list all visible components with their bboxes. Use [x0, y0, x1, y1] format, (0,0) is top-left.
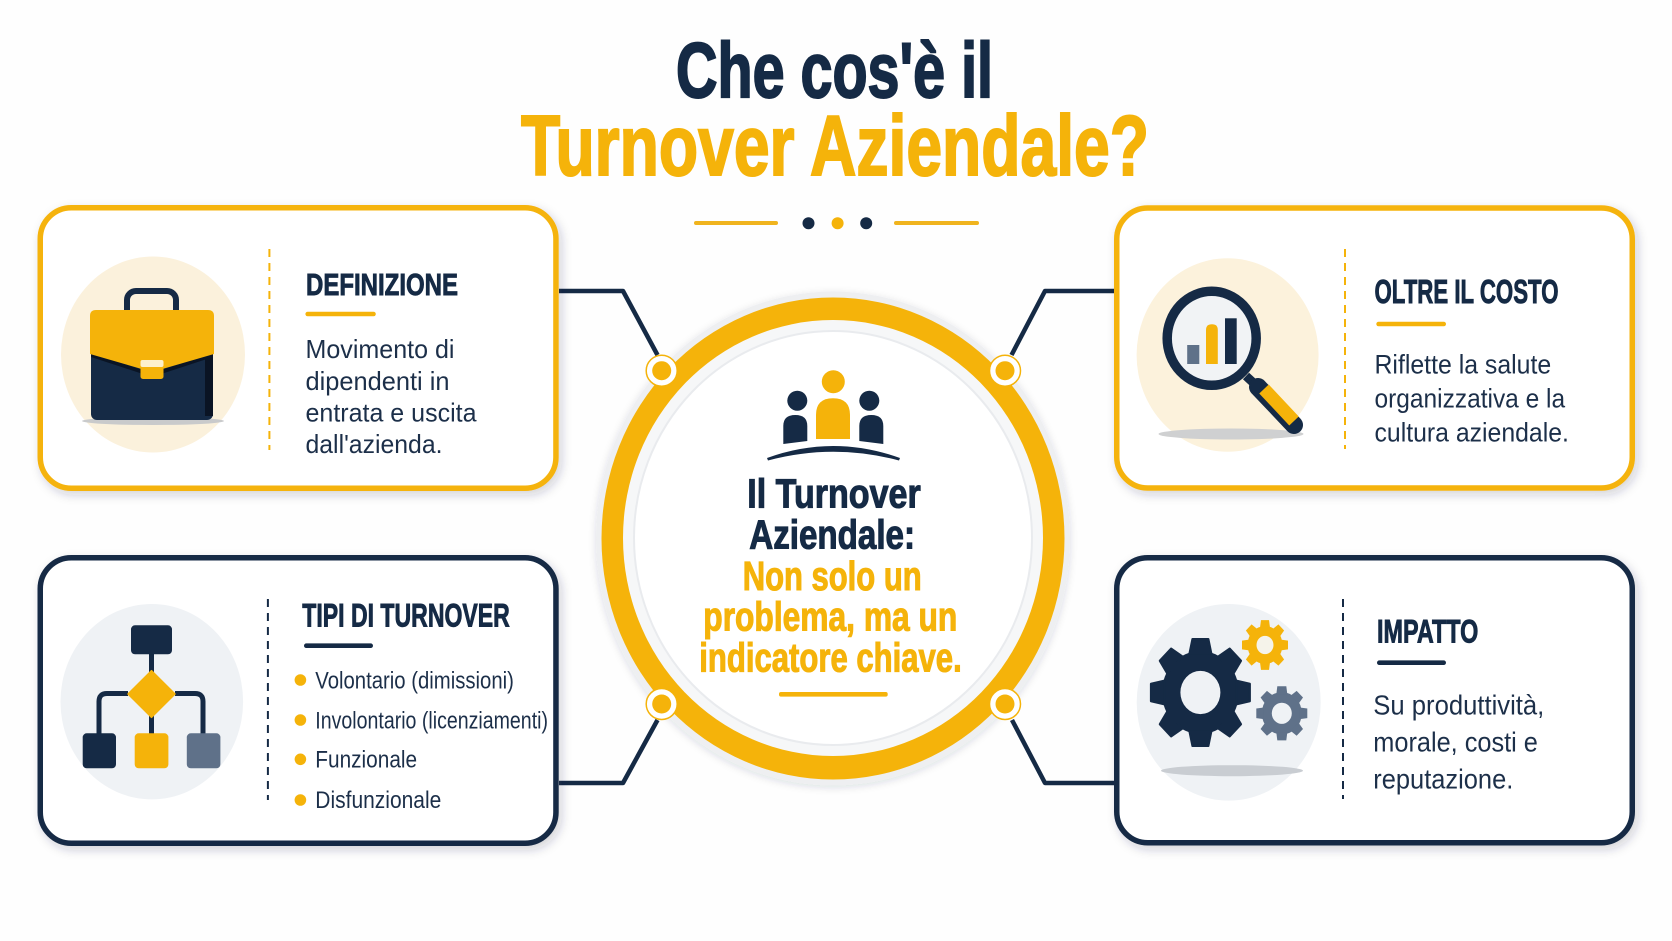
icon: org chart	[60, 604, 243, 799]
body text: organizzativa e la	[1374, 383, 1566, 413]
panel: definizione	[40, 208, 556, 488]
divider	[267, 599, 269, 800]
divider	[268, 249, 270, 450]
heading: TIPI DI TURNOVER	[302, 598, 510, 634]
icon: magnifier	[1137, 258, 1319, 452]
central circle	[596, 292, 1070, 786]
center text dark: Aziendale:	[749, 511, 915, 557]
heading: OLTRE IL COSTO	[1374, 273, 1558, 310]
body text: dipendenti in	[306, 366, 450, 396]
title	[521, 26, 1149, 194]
panel: impatto	[1117, 558, 1632, 843]
body text: morale, costi e	[1373, 726, 1538, 758]
center text yellow: Non solo un	[743, 553, 922, 599]
heading underline	[305, 312, 376, 316]
connectors	[559, 291, 1114, 783]
center text dark: Il Turnover	[747, 470, 921, 516]
heading: DEFINIZIONE	[306, 267, 458, 302]
body text	[1373, 689, 1544, 794]
body text: Movimento di	[306, 334, 454, 364]
body text	[306, 334, 477, 459]
small grey gear	[1256, 686, 1307, 740]
center text yellow: problema, ma un	[703, 594, 957, 640]
large gear	[1151, 639, 1250, 746]
heading underline	[1377, 660, 1446, 665]
bullet list: Volontario (dimissioni)	[315, 667, 514, 694]
icon: briefcase	[61, 256, 245, 452]
center text yellow	[699, 553, 962, 681]
title ornament	[694, 217, 979, 229]
icon: gears	[1137, 604, 1321, 801]
bullet list: Involontario (licenziamenti)	[315, 707, 548, 734]
divider	[1344, 249, 1346, 449]
icon: people	[767, 370, 900, 460]
bullet list: Funzionale	[315, 746, 417, 774]
center underline	[779, 692, 888, 697]
title line 2: Turnover Aziendale?	[521, 99, 1149, 194]
center text yellow: indicatore chiave.	[699, 635, 962, 681]
center text dark	[747, 470, 921, 557]
body text: dall'azienda.	[306, 429, 442, 459]
body text: Riflette la salute	[1374, 349, 1551, 379]
bullet list: Disfunzionale	[315, 787, 441, 814]
heading underline	[304, 643, 373, 648]
body text	[1374, 349, 1569, 448]
title line 1: Che cos'è il	[676, 26, 993, 114]
heading underline	[1376, 322, 1446, 326]
body text: cultura aziendale.	[1374, 418, 1569, 448]
panel: tipi di turnover	[40, 558, 556, 843]
body text: Su produttività,	[1373, 689, 1544, 720]
small yellow gear	[1242, 620, 1288, 670]
divider	[1342, 599, 1344, 799]
heading: IMPATTO	[1377, 614, 1478, 650]
connector nodes	[646, 355, 1020, 720]
body text: reputazione.	[1373, 763, 1513, 794]
bullet list	[295, 667, 548, 814]
body text: entrata e uscita	[306, 398, 477, 428]
panel: oltre il costo	[1117, 208, 1632, 488]
